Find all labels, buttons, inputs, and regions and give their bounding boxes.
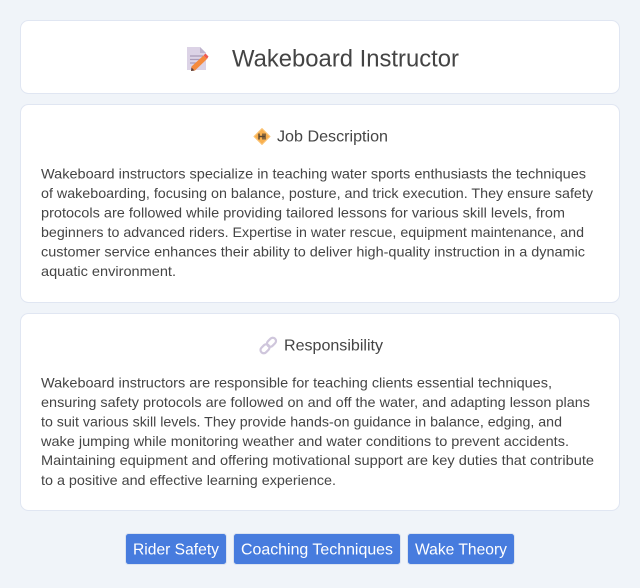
text block: job description: customer service enhances their ability to deliver high-quality instruction in a dynamic	[41, 244, 585, 260]
text block: job description: of wakeboarding, focusing on balance, posture, and trick execution. They ensure safety	[41, 185, 593, 201]
text block: responsibility	[40, 374, 594, 488]
text block: job description	[41, 166, 593, 279]
panel: responsibility	[20, 314, 620, 510]
tag: wake theory: Wake Theory	[415, 542, 507, 558]
panel: job description	[20, 104, 620, 302]
text block: job description: protocols are followed while providing tailored lessons for various skill levels, from	[41, 204, 565, 220]
text block: job description: Wakeboard instructors specialize in teaching water sports enthusiasts the techniques	[41, 166, 586, 182]
heading: job description: Job Description	[277, 128, 388, 146]
text block: responsibility: to a positive and effective learning experience.	[41, 472, 336, 488]
tag: coaching techniques	[234, 534, 400, 564]
tag: wake theory	[408, 534, 514, 564]
text block: responsibility: Wakeboard instructors are responsible for teaching clients essential techniques,	[41, 374, 552, 390]
text block: responsibility: ensuring safety protocols are followed on and off the water, and adapting lesson plans	[41, 394, 590, 410]
icon: document with pencil	[187, 47, 208, 71]
tag: rider safety: Rider Safety	[133, 542, 219, 558]
icon: diamond road sign	[254, 128, 270, 144]
panel: title card	[20, 20, 620, 94]
text block: responsibility: Maintaining equipment and offering motivational support are key duties that contribute	[41, 452, 594, 468]
text block: responsibility: wake jumping while monitoring weather and water conditions to prevent accidents.	[40, 433, 569, 449]
icon: chain link	[259, 336, 277, 355]
text block: responsibility: to suit various skill levels. They provide hands-on guidance in balance, edging, and	[41, 414, 562, 430]
text block: job description: beginners to advanced riders. Expertise in water rescue, equipment maintenance, and	[41, 224, 584, 240]
heading: responsibility: Responsibility	[284, 338, 383, 354]
text block: job description: aquatic environment.	[41, 263, 176, 279]
tag: rider safety	[126, 534, 226, 564]
title: Wakeboard Instructor	[232, 46, 459, 72]
tag: coaching techniques: Coaching Techniques	[241, 542, 393, 558]
